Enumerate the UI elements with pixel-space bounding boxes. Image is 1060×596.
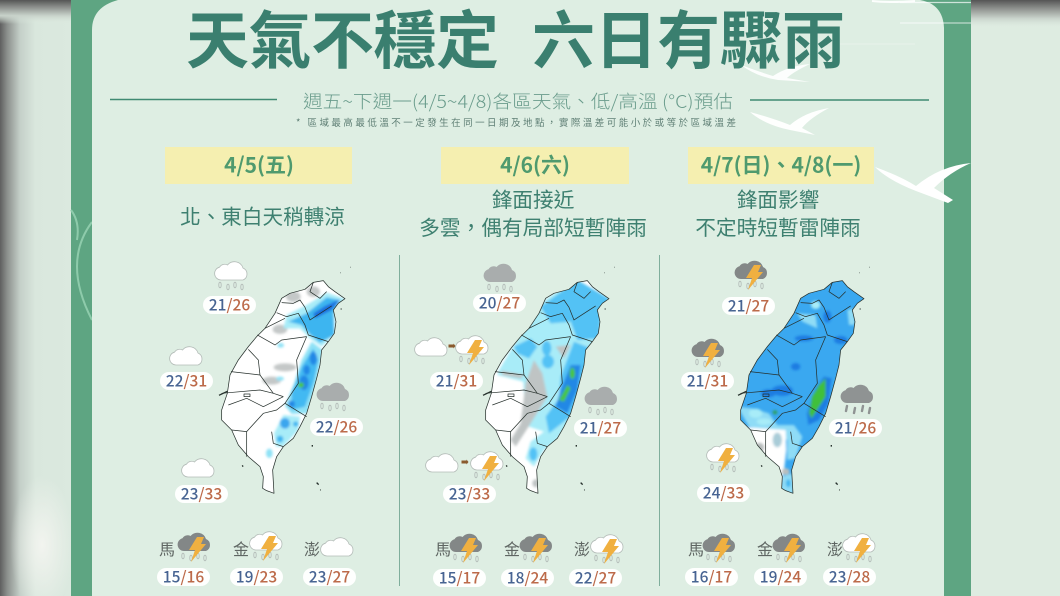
forecast text 4/7: 鋒面影響	[737, 183, 819, 213]
temperature pills: 4/6: 21/31	[436, 370, 477, 392]
icons: 4/7	[692, 261, 875, 563]
decorative leaf	[71, 210, 92, 320]
temperature pills: 4/5: 23/27	[309, 566, 350, 588]
temperature pills: 4/6: 23/33	[449, 482, 490, 504]
outlying island labels: 馬	[159, 536, 175, 560]
icons: 4/6	[415, 264, 623, 564]
map: 4/5 rainfall	[217, 267, 351, 497]
bird 1	[741, 64, 810, 82]
temperature pills: 4/7-4/8: 16/17	[691, 566, 732, 588]
icons: 4/5	[170, 262, 353, 562]
bird 2	[750, 108, 829, 135]
outlying island labels: 金	[757, 536, 773, 560]
outlying island labels: 金	[504, 536, 520, 560]
outlying island labels: 澎	[827, 536, 843, 560]
temperature pills: 4/7-4/8: 21/31	[687, 370, 728, 392]
date tag 4/5: 4/5(五)	[224, 150, 294, 180]
temperature pills: 4/6: 22/27	[575, 566, 616, 588]
forecast text 4/7: 不定時短暫雷陣雨	[695, 211, 861, 241]
temperature pills: 4/7-4/8	[681, 294, 882, 588]
outlying island labels: 澎	[304, 536, 320, 560]
map: 4/6 rainfall	[481, 267, 615, 497]
date tag 4/5	[165, 147, 352, 184]
date tag 4/6: 4/6(六)	[500, 150, 570, 180]
column dividers	[400, 255, 660, 586]
temperature pills: 4/5: 22/31	[166, 370, 207, 392]
temperature pills: 4/6: 20/27	[479, 292, 520, 314]
title	[186, 0, 845, 82]
decorative white streaks	[840, 1, 971, 44]
bird 3	[875, 163, 971, 203]
temperature pills: 4/5: 22/26	[316, 416, 357, 438]
temperature pills: 4/7-4/8: 21/26	[835, 416, 876, 438]
outlying island labels: 馬	[688, 536, 704, 560]
temperature pills: 4/6: 15/17	[439, 566, 480, 588]
temperature pills: 4/5: 23/33	[181, 482, 222, 504]
date tag 4/7 4/8	[688, 147, 874, 184]
forecast text 4/7	[695, 183, 861, 241]
temperature pills: 4/6	[430, 292, 627, 588]
heading rules	[110, 98, 929, 101]
temperature pills: 4/7-4/8: 21/27	[728, 294, 769, 316]
temperature pills: 4/5: 21/26	[209, 294, 250, 316]
temperature pills: 4/7-4/8: 19/24	[760, 566, 801, 588]
temperature pills: 4/6: 18/24	[507, 566, 548, 588]
outlying island labels	[159, 536, 843, 560]
outlying island labels: 金	[233, 536, 249, 560]
forecast text 4/6: 多雲，偶有局部短暫陣雨	[419, 211, 647, 241]
subtitle: 週五~下週一(4/5~4/8)各區天氣、低/高溫 (°C)預估	[303, 88, 733, 114]
outlying island labels: 馬	[435, 536, 451, 560]
temperature pills: 4/5: 15/16	[163, 566, 204, 588]
temperature pills: 4/7-4/8: 23/28	[829, 566, 870, 588]
outlying island labels: 澎	[574, 536, 590, 560]
forecast text 4/5: 北、東白天稍轉涼	[180, 200, 345, 230]
date tag 4/6	[441, 147, 629, 184]
date tag 4/7 4/8: 4/7(日)、4/8(一)	[701, 150, 861, 180]
map: 4/7-4/8 rainfall	[736, 267, 870, 497]
temperature pills: 4/5	[157, 294, 363, 588]
temperature pills: 4/7-4/8: 24/33	[703, 482, 744, 504]
temperature pills: 4/6: 21/27	[580, 416, 621, 438]
forecast text 4/6	[419, 183, 647, 241]
temperature pills: 4/5: 19/23	[236, 566, 277, 588]
forecast text 4/6: 鋒面接近	[492, 183, 575, 213]
footnote: * 區域最高最低溫不一定發生在同一日期及地點，實際溫差可能小於或等於區域溫差	[296, 115, 736, 129]
